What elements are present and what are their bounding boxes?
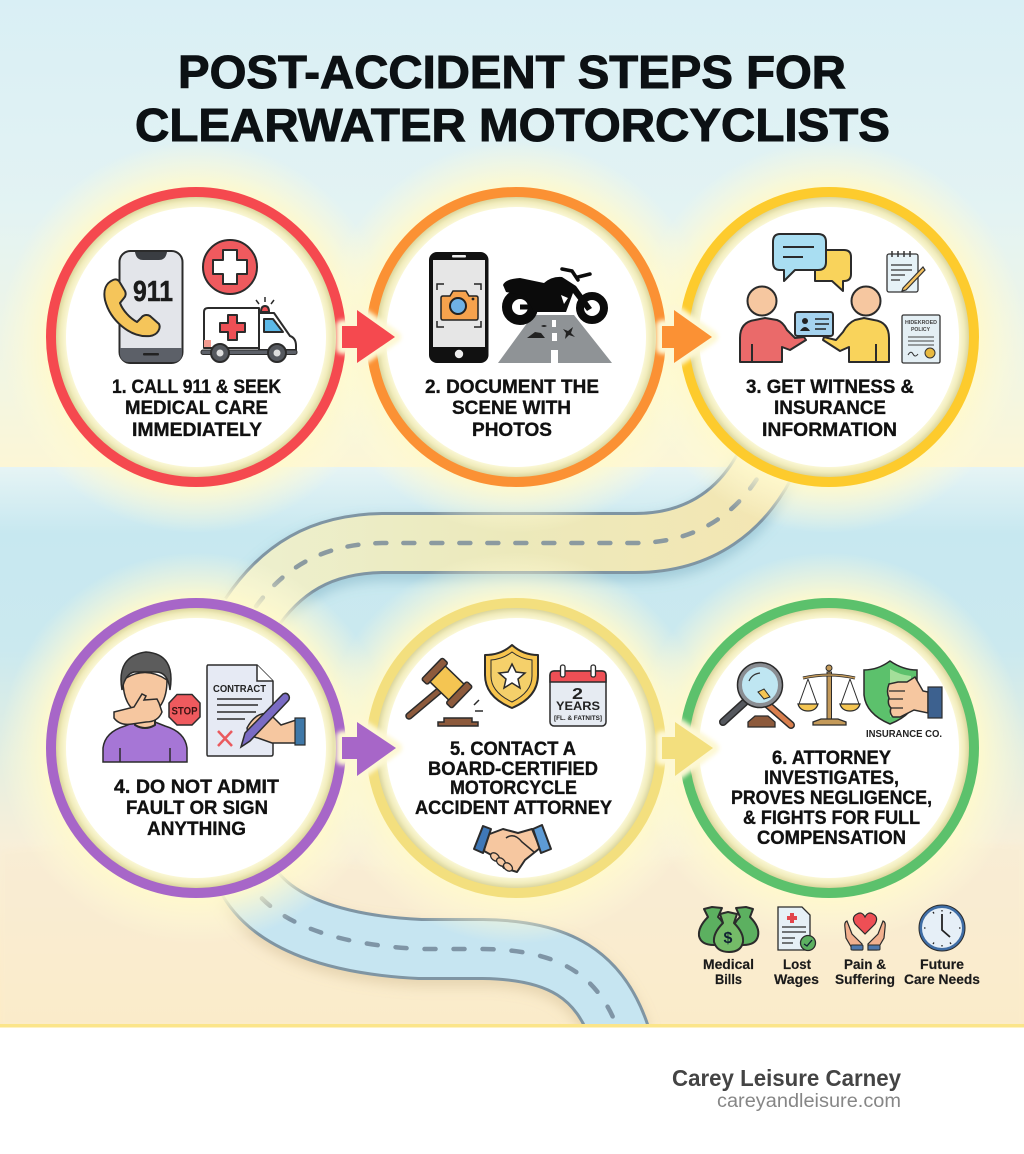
compensation item: pain and suffering: Suffering bbox=[835, 972, 895, 987]
text: step 3: INFORMATION bbox=[762, 419, 897, 441]
icon: stop sign: STOP bbox=[172, 706, 198, 718]
icon: motorcycle on road bbox=[498, 269, 612, 363]
text: step 5: BOARD-CERTIFIED bbox=[428, 758, 598, 780]
icon: 2 years calendar: [FL. & FATNITS] bbox=[554, 715, 602, 722]
road: from step 4 to page bottom bbox=[245, 875, 620, 1041]
compensation item: future care needs: Care Needs bbox=[904, 972, 980, 987]
icon: person covering mouth bbox=[103, 652, 187, 762]
text: step 6: & FIGHTS FOR FULL bbox=[743, 807, 920, 829]
panel: step 1 circle bbox=[51, 192, 341, 482]
text: step 3 bbox=[746, 376, 914, 441]
icon: phone 911 bbox=[104, 251, 182, 363]
arrow: step 5 to 6 bbox=[662, 722, 713, 776]
icon: insurance shield with fist bbox=[864, 661, 942, 724]
label: insurance co: INSURANCE CO. bbox=[866, 728, 942, 740]
text: step 5: MOTORCYCLE bbox=[450, 777, 577, 799]
icon: gavel bbox=[409, 658, 483, 726]
text: step 5: 5. CONTACT A bbox=[450, 738, 576, 760]
text: step 6: PROVES NEGLIGENCE, bbox=[731, 787, 932, 809]
panel: step 3 circle bbox=[684, 192, 974, 482]
compensation item: medical bills: $ bbox=[724, 930, 732, 947]
text: step 2 bbox=[425, 376, 599, 441]
panel: step 5 circle bbox=[371, 603, 661, 893]
text: step 3: 3. GET WITNESS & bbox=[746, 376, 914, 398]
text: step 6: COMPENSATION bbox=[757, 827, 906, 849]
text: step 4: ANYTHING bbox=[147, 818, 246, 840]
text: step 2: PHOTOS bbox=[472, 419, 552, 441]
arrow: step 4 to 5 bbox=[342, 722, 396, 776]
icon: handshake bbox=[474, 825, 551, 873]
icon: phone with camera bbox=[429, 252, 488, 363]
compensation item: pain and suffering: Pain & bbox=[844, 957, 886, 972]
icon: contract with pen and hand bbox=[207, 665, 305, 756]
text: step 4: 4. DO NOT ADMIT bbox=[114, 776, 279, 798]
road: from step 3 to step 4 bbox=[250, 455, 770, 621]
icon: medical cross bbox=[203, 240, 257, 294]
icon: 2 years calendar bbox=[550, 665, 606, 726]
icon: ambulance bbox=[201, 297, 297, 362]
icon: magnifying glass bbox=[723, 662, 791, 727]
text: step 6 bbox=[731, 747, 932, 849]
icon: 2 years calendar: 2 bbox=[572, 686, 583, 703]
text: step 5: ACCIDENT ATTORNEY bbox=[415, 797, 612, 819]
panel: step 2 circle bbox=[371, 192, 661, 482]
arrow: step 2 to 3 bbox=[662, 310, 712, 363]
title bbox=[135, 46, 890, 151]
compensation item: medical bills bbox=[699, 907, 758, 987]
text: step 1: IMMEDIATELY bbox=[132, 419, 262, 441]
text: step 2: 2. DOCUMENT THE bbox=[425, 376, 599, 398]
icon: shield with star bbox=[485, 645, 538, 708]
compensation item: future care needs bbox=[904, 905, 980, 987]
text: step 2: SCENE WITH bbox=[452, 397, 571, 419]
text: step 6: 6. ATTORNEY bbox=[772, 747, 891, 769]
text: step 5 bbox=[415, 738, 612, 819]
title: CLEARWATER MOTORCYCLISTS bbox=[135, 99, 890, 151]
arrow: step 1 to 2 bbox=[342, 310, 395, 363]
compensation item: future care needs: Future bbox=[920, 957, 965, 972]
icon: insurance policy document bbox=[902, 315, 940, 363]
icon: 2 years calendar: YEARS bbox=[556, 701, 600, 713]
text: step 1 bbox=[112, 376, 281, 441]
compensation item: lost wages: Lost bbox=[783, 957, 811, 972]
panel: step 4 circle bbox=[51, 603, 341, 893]
icon: insurance policy document: POLICY bbox=[911, 327, 931, 333]
icon: phone 911: 911 bbox=[133, 276, 173, 308]
icon: two people exchanging card bbox=[740, 286, 889, 362]
compensation item: medical bills: Medical bbox=[703, 957, 754, 972]
icon: scales of justice bbox=[798, 665, 860, 725]
compensation item: pain and suffering bbox=[835, 913, 895, 987]
icon: insurance policy document: HIDEKROED bbox=[905, 320, 937, 326]
text: step 1: MEDICAL CARE bbox=[125, 397, 268, 419]
icon: contract with pen and hand: CONTRACT bbox=[213, 684, 266, 695]
compensation item: lost wages: Wages bbox=[774, 972, 819, 987]
footer band bbox=[0, 1024, 1024, 1154]
text: step 4: FAULT OR SIGN bbox=[126, 797, 268, 819]
compensation item: medical bills: Bills bbox=[715, 972, 742, 987]
icon: stop sign bbox=[169, 694, 200, 725]
title: POST-ACCIDENT STEPS FOR bbox=[178, 46, 846, 98]
text: step 4 bbox=[114, 776, 279, 840]
compensation item: lost wages bbox=[774, 907, 819, 987]
icon: notepad and pencil bbox=[887, 251, 925, 292]
footer: website: careyandleisure.com bbox=[717, 1091, 901, 1112]
text: step 1: 1. CALL 911 & SEEK bbox=[112, 376, 281, 398]
circle glows bbox=[0, 141, 1024, 944]
icon: speech bubbles bbox=[773, 234, 851, 291]
text: step 6: INVESTIGATES, bbox=[764, 767, 899, 789]
panel: step 6 circle bbox=[684, 603, 974, 893]
text: step 3: INSURANCE bbox=[774, 397, 886, 419]
footer: firm name: Carey Leisure Carney bbox=[672, 1065, 901, 1091]
